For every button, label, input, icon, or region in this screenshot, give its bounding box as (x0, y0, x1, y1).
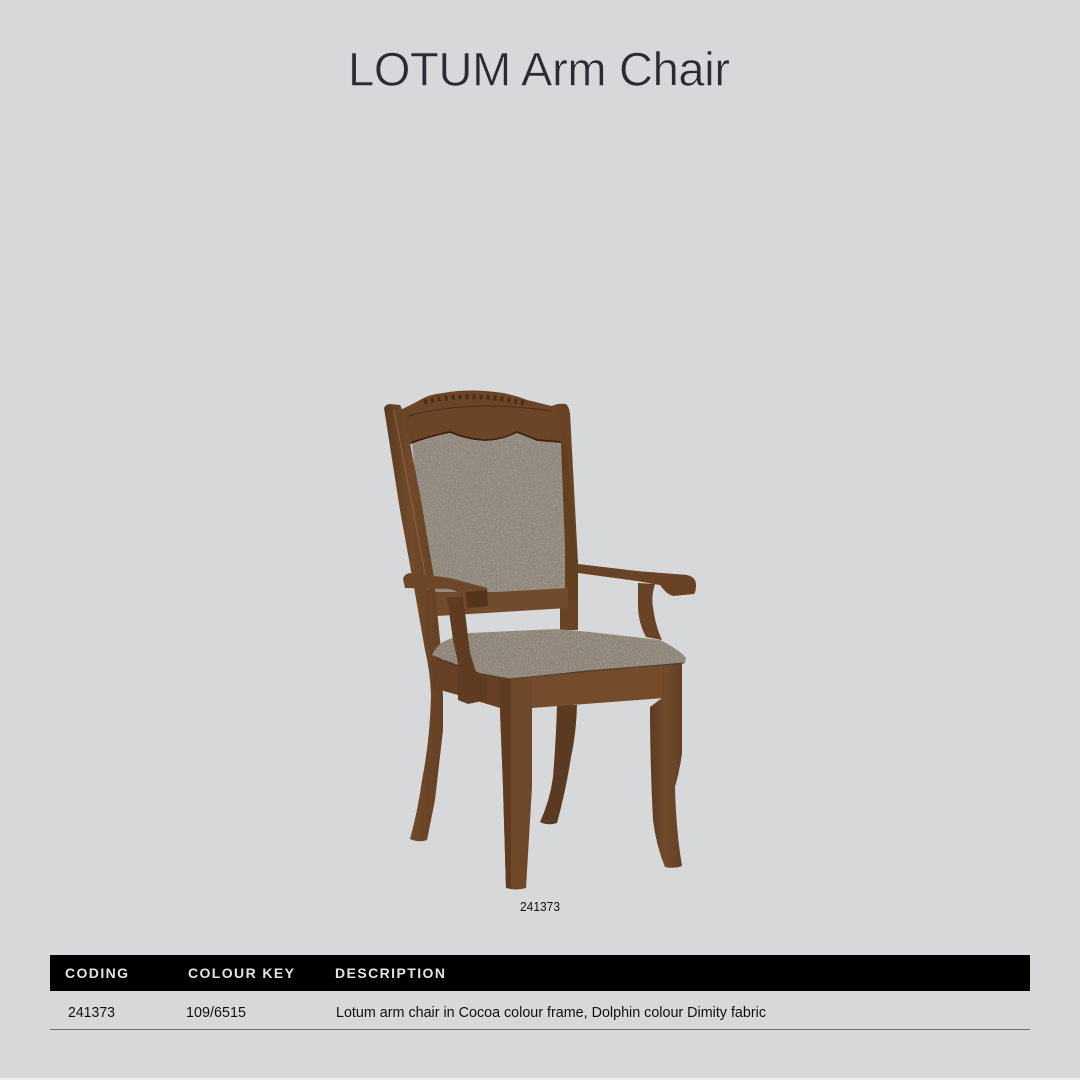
chair illustration (384, 390, 696, 890)
table header bar (50, 955, 1030, 991)
seat cushion (432, 629, 686, 679)
rear right leg (540, 705, 577, 824)
left arm carved end (466, 590, 488, 608)
left arm rest (403, 573, 488, 608)
header: description: DESCRIPTION (335, 965, 445, 981)
front left leg shaded face (500, 678, 511, 888)
right post overlap strip (561, 443, 578, 600)
table (50, 955, 1030, 1030)
back cushion (412, 433, 567, 594)
caption: product code: 241373 (520, 900, 560, 914)
title: LOTUM Arm Chair (348, 42, 730, 96)
right arm post (638, 583, 662, 640)
row: description: Lotum arm chair in Cocoa colour frame, Dolphin colour Dimity fabric (336, 1005, 766, 1021)
left arm post (447, 597, 487, 704)
left post groove (394, 410, 428, 590)
carved crest rail (398, 390, 564, 446)
lower back rail (430, 588, 568, 616)
left side seat rail (432, 656, 500, 708)
header: colour key: COLOUR KEY (188, 965, 295, 981)
front right leg (650, 660, 682, 868)
row: code: 241373 (68, 1005, 115, 1021)
right back post (552, 404, 578, 630)
header: coding: CODING (65, 965, 128, 981)
right arm rest (578, 564, 696, 596)
front left leg (500, 678, 532, 890)
front seat rail (500, 660, 664, 710)
row: colour key: 109/6515 (186, 1005, 246, 1021)
left back post and rear left leg (384, 404, 443, 841)
